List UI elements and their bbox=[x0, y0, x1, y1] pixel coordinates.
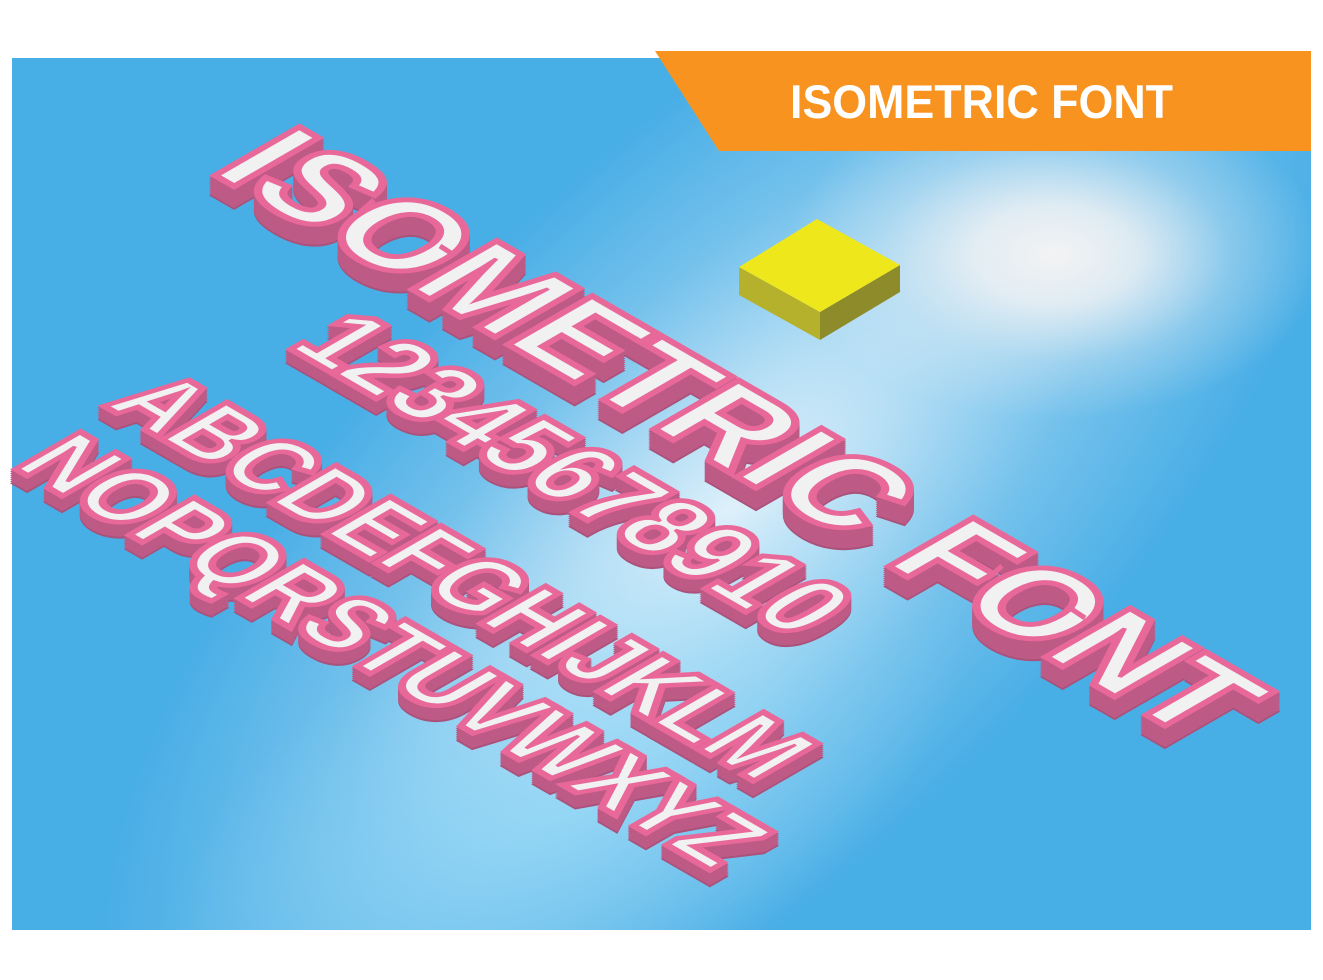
alphabet row: A to M: ABCDEFGHIJKLM bbox=[85, 358, 839, 794]
heading word: FONT: FONT bbox=[858, 508, 1298, 763]
heading word: ISOMETRIC: ISOMETRIC bbox=[184, 115, 953, 560]
numerals row: 12345678910 bbox=[267, 308, 880, 663]
heading word: FONT: FONT bbox=[858, 504, 1298, 759]
heading word: FONT: FONT bbox=[858, 514, 1298, 769]
heading word: ISOMETRIC: ISOMETRIC bbox=[184, 111, 953, 556]
heading word: ISOMETRIC: ISOMETRIC bbox=[184, 125, 953, 570]
alphabet row: N to Z: NOPQRSTUVWXYZ bbox=[0, 419, 793, 882]
heading word: ISOMETRIC: ISOMETRIC bbox=[184, 113, 953, 558]
heading word: FONT: FONT bbox=[858, 520, 1298, 775]
heading word: ISOMETRIC: ISOMETRIC bbox=[184, 127, 953, 572]
alphabet row: N to Z: NOPQRSTUVWXYZ bbox=[0, 429, 793, 892]
numerals row: 12345678910 bbox=[267, 310, 880, 665]
alphabet row: A to M: ABCDEFGHIJKLM bbox=[85, 366, 839, 802]
alphabet row: A to M: ABCDEFGHIJKLM bbox=[85, 364, 839, 800]
icon: yellow isometric tile bbox=[739, 219, 900, 340]
heading word: ISOMETRIC: ISOMETRIC bbox=[184, 121, 953, 566]
alphabet row: N to Z: NOPQRSTUVWXYZ bbox=[0, 421, 793, 884]
alphabet row: N to Z: NOPQRSTUVWXYZ bbox=[0, 419, 793, 882]
heading word: ISOMETRIC: ISOMETRIC bbox=[184, 109, 953, 554]
heading word: FONT: FONT bbox=[858, 512, 1298, 767]
numerals row: 12345678910 bbox=[267, 298, 880, 653]
alphabet row: N to Z: NOPQRSTUVWXYZ bbox=[0, 431, 793, 894]
alphabet row: A to M: ABCDEFGHIJKLM bbox=[85, 368, 839, 804]
alphabet row: N to Z: NOPQRSTUVWXYZ bbox=[0, 423, 793, 886]
alphabet row: A to M: ABCDEFGHIJKLM bbox=[85, 358, 839, 794]
heading word: FONT: FONT bbox=[858, 500, 1298, 755]
numerals row: 12345678910 bbox=[267, 300, 880, 655]
heading word: ISOMETRIC: ISOMETRIC bbox=[184, 117, 953, 562]
alphabet row: A to M: ABCDEFGHIJKLM bbox=[85, 360, 839, 796]
heading word: FONT: FONT bbox=[858, 510, 1298, 765]
alphabet row: N to Z: NOPQRSTUVWXYZ bbox=[0, 425, 793, 888]
alphabet row: A to M: ABCDEFGHIJKLM bbox=[85, 370, 839, 806]
alphabet row: A to M: ABCDEFGHIJKLM bbox=[85, 372, 839, 808]
numerals row: 12345678910 bbox=[267, 304, 880, 659]
numerals row: 12345678910 bbox=[267, 306, 880, 661]
heading word: FONT: FONT bbox=[858, 518, 1298, 773]
heading word: ISOMETRIC: ISOMETRIC bbox=[184, 129, 953, 574]
heading word: FONT: FONT bbox=[858, 500, 1298, 755]
heading word: FONT: FONT bbox=[858, 502, 1298, 757]
alphabet row: A to M: ABCDEFGHIJKLM bbox=[85, 362, 839, 798]
banner: orange title ribbon bbox=[655, 51, 1311, 151]
heading word: FONT: FONT bbox=[858, 506, 1298, 761]
heading word: ISOMETRIC: ISOMETRIC bbox=[184, 123, 953, 568]
numerals row: 12345678910 bbox=[267, 296, 880, 651]
heading word: FONT: FONT bbox=[858, 516, 1298, 771]
numerals row: 12345678910 bbox=[267, 302, 880, 657]
numerals row: 12345678910 bbox=[267, 296, 880, 651]
banner heading: ISOMETRIC FONT bbox=[790, 75, 1173, 128]
alphabet row: N to Z: NOPQRSTUVWXYZ bbox=[0, 427, 793, 890]
heading word: ISOMETRIC: ISOMETRIC bbox=[184, 109, 953, 554]
alphabet row: N to Z: NOPQRSTUVWXYZ bbox=[0, 433, 793, 896]
heading word: ISOMETRIC: ISOMETRIC bbox=[184, 119, 953, 564]
